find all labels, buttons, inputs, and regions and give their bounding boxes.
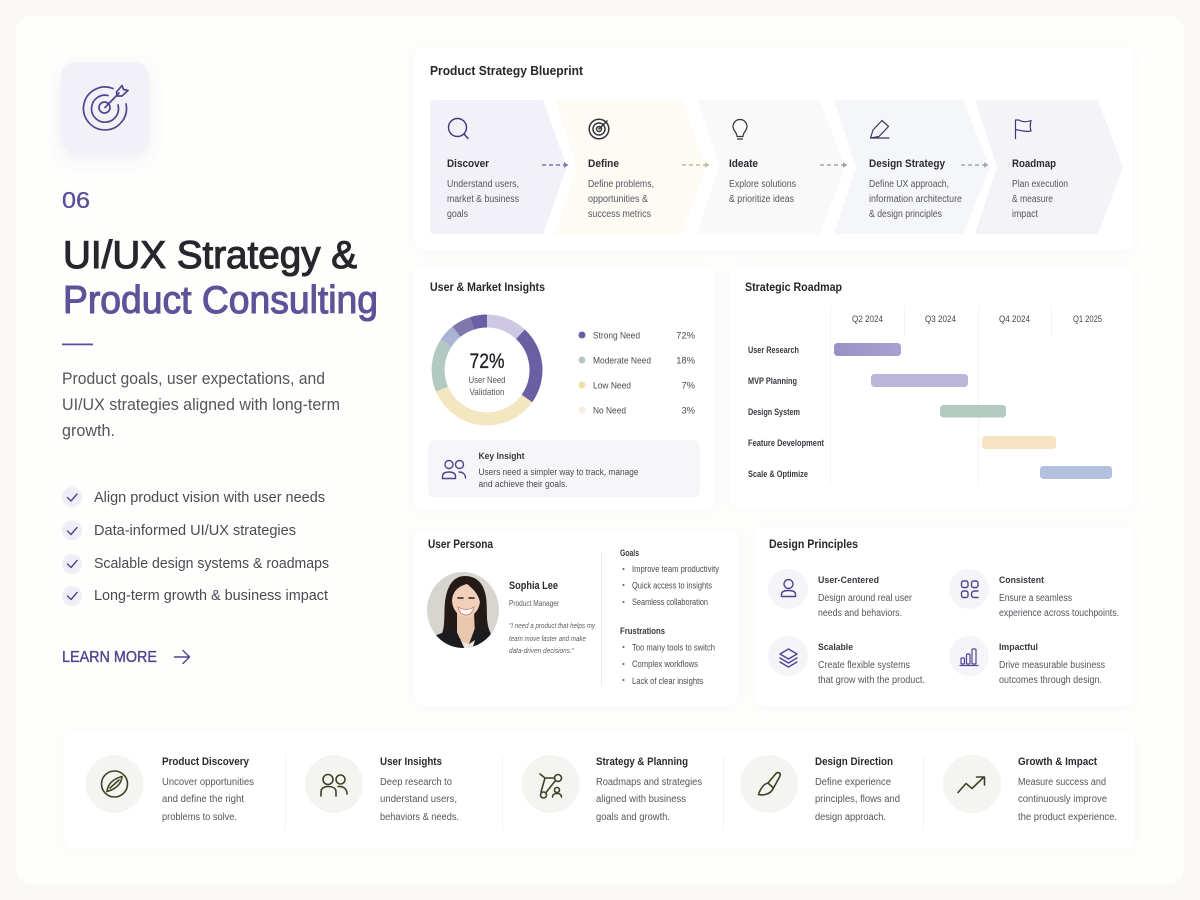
checklist <box>62 487 329 606</box>
portrait <box>427 572 499 648</box>
chevron: define: Define <box>588 158 619 170</box>
row: design system: Design System <box>748 407 800 417</box>
legend: 7% <box>681 380 695 390</box>
chevron: ideate: & prioritize ideas <box>729 194 794 205</box>
legend: 18% <box>676 354 695 366</box>
legend: No Need <box>593 404 626 416</box>
goals list: Goals <box>620 548 639 558</box>
chevron: design strategy: Define UX approach, <box>869 179 949 190</box>
item: design direction <box>740 755 900 823</box>
principle: user-centered <box>768 569 913 619</box>
donut chart <box>438 321 536 419</box>
description: Product goals, user expectations, and <box>62 370 325 388</box>
description: growth. <box>62 422 115 440</box>
legend: Low Need <box>593 380 631 390</box>
goals list: Improve team productivity <box>632 564 720 574</box>
frustrations list: Frustrations <box>620 626 665 636</box>
checklist: Long-term growth & business impact <box>94 587 329 604</box>
row: feature development: Feature Development <box>748 438 824 448</box>
chevron: roadmap <box>975 100 1123 234</box>
row: feature development <box>748 436 1056 449</box>
legend: Moderate Need <box>593 354 651 366</box>
heading: User & Market Insights <box>430 282 545 294</box>
arrow <box>820 162 848 168</box>
quarter headers: Q2 2024 <box>852 314 883 324</box>
frustrations list: Too many tools to switch <box>632 642 715 652</box>
item: product discovery: and define the right <box>162 794 244 805</box>
item: strategy and planning: aligned with business <box>596 794 686 805</box>
arrow <box>682 162 710 168</box>
heading: Product Strategy Blueprint <box>430 64 584 78</box>
donut centre value: User Need <box>468 375 506 385</box>
chevron: roadmap: impact <box>1012 209 1038 220</box>
item: product discovery: Uncover opportunities <box>162 777 254 788</box>
arrow <box>961 162 988 168</box>
item: product discovery: Product Discovery <box>162 756 249 768</box>
chevron: ideate: Ideate <box>729 158 758 170</box>
persona name and quote: "I need a product that helps my <box>509 621 596 630</box>
chevron: define <box>555 100 706 234</box>
quarter headers <box>852 314 1102 324</box>
goals list: Seamless collaboration <box>632 597 708 607</box>
panel: strategic roadmap <box>730 267 1132 508</box>
chevron: discover: Understand users, <box>447 179 519 190</box>
chevron: ideate <box>697 100 845 234</box>
legend: 72% <box>676 330 695 340</box>
legend <box>578 330 695 416</box>
checklist: Scalable design systems & roadmaps <box>94 555 329 572</box>
callout: key insight: Users need a simpler way to track, manage <box>478 466 638 477</box>
chevron: design strategy: Design Strategy <box>869 158 945 170</box>
item: design direction: principles, flows and <box>815 794 900 805</box>
item: user insights: behaviors & needs. <box>380 812 459 823</box>
item: design direction: design approach. <box>815 812 886 823</box>
chevron: roadmap: & measure <box>1012 194 1053 205</box>
item: user insights: understand users, <box>380 794 457 805</box>
principle: impactful <box>949 636 1105 686</box>
row: mvp planning <box>748 374 968 387</box>
section number: 06 <box>62 187 90 213</box>
chevron: define: success metrics <box>588 209 651 220</box>
principle: consistent: Ensure a seamless <box>999 593 1072 604</box>
callout: key insight: Key Insight <box>478 451 524 461</box>
row: mvp planning: MVP Planning <box>748 376 797 386</box>
chevron: design strategy: & design principles <box>869 209 942 220</box>
item: growth and impact: Growth & Impact <box>1018 756 1097 768</box>
row: scale and optimize <box>748 466 1112 479</box>
item: growth and impact <box>943 755 1117 823</box>
item: growth and impact: the product experience. <box>1018 812 1117 823</box>
principle: impactful: Drive measurable business <box>999 660 1105 671</box>
panel: capabilities strip <box>64 733 1134 848</box>
item: growth and impact: continuously improve <box>1018 794 1107 805</box>
gantt chart <box>748 306 1112 485</box>
panel: user and market insights <box>414 267 714 510</box>
persona name and quote: data-driven decisions." <box>509 646 574 655</box>
quarter headers: Q3 2024 <box>925 314 956 324</box>
item: strategy and planning: Strategy & Planning <box>596 756 688 768</box>
principle: scalable: Create flexible systems <box>818 660 910 671</box>
chevron: roadmap: Plan execution <box>1012 179 1068 190</box>
chevron: discover: goals <box>447 209 468 220</box>
item: product discovery <box>86 755 254 823</box>
principle: consistent: experience across touchpoints. <box>999 608 1119 619</box>
item: design direction: Define experience <box>815 777 891 788</box>
item: product discovery: problems to solve. <box>162 812 237 823</box>
arrow <box>542 162 568 168</box>
checklist: Align product vision with user needs <box>94 489 325 506</box>
heading: Design Principles <box>769 539 858 551</box>
panel: product strategy blueprint <box>414 48 1132 250</box>
row: user research: User Research <box>748 345 799 355</box>
description <box>62 370 340 440</box>
quarter headers: Q1 2025 <box>1073 314 1102 324</box>
row: scale and optimize: Scale & Optimize <box>748 469 808 479</box>
item: growth and impact: Measure success and <box>1018 777 1106 788</box>
quarter headers: Q4 2024 <box>999 314 1030 324</box>
checklist: Data-informed UI/UX strategies <box>94 522 296 539</box>
title <box>63 234 378 322</box>
principle: scalable: Scalable <box>818 642 853 652</box>
goals list: Quick access to insights <box>632 580 712 590</box>
persona name and quote <box>509 580 596 655</box>
principle: impactful: Impactful <box>999 642 1038 652</box>
persona name and quote: Product Manager <box>509 599 559 608</box>
frustrations list: Lack of clear insights <box>632 676 704 686</box>
left column: hero <box>61 62 378 666</box>
donut centre value: 72% <box>470 350 504 373</box>
donut centre value: Validation <box>470 387 505 397</box>
chevron: roadmap: Roadmap <box>1012 158 1056 170</box>
chevron: discover: market & business <box>447 194 519 205</box>
item: user insights <box>305 755 459 823</box>
item: user insights: Deep research to <box>380 777 452 788</box>
chevron: define: Define problems, <box>588 179 654 190</box>
title: UI/UX Strategy & <box>63 234 357 277</box>
title rule <box>62 344 93 345</box>
title: Product Consulting <box>63 279 378 322</box>
item: strategy and planning <box>522 755 702 823</box>
chevron: ideate: Explore solutions <box>729 179 796 190</box>
panel: design principles <box>755 527 1133 706</box>
learn more link: LEARN MORE <box>62 649 157 666</box>
principle: impactful: outcomes through design. <box>999 675 1102 686</box>
panel: user persona <box>427 540 719 686</box>
callout: key insight: and achieve their goals. <box>478 478 568 489</box>
row: user research <box>748 343 901 356</box>
persona name and quote: Sophia Lee <box>509 580 558 592</box>
principle: user-centered: needs and behaviors. <box>818 608 902 619</box>
principle: consistent <box>949 569 1119 619</box>
goals list <box>620 548 720 607</box>
principle: scalable: that grow with the product. <box>818 675 925 686</box>
principle: consistent: Consistent <box>999 575 1044 585</box>
frustrations list <box>620 626 715 686</box>
frustrations list: Complex workflows <box>632 659 699 669</box>
heading: User Persona <box>428 539 494 551</box>
legend: 3% <box>681 404 695 416</box>
item: strategy and planning: goals and growth. <box>596 812 670 823</box>
principle: user-centered: Design around real user <box>818 593 913 604</box>
chevron: discover: Discover <box>447 158 490 170</box>
principle: user-centered: User-Centered <box>818 575 879 585</box>
chevron: design strategy: information architecture <box>869 194 962 205</box>
item: strategy and planning: Roadmaps and strategies <box>596 777 702 788</box>
chevron: design strategy <box>834 100 990 234</box>
heading: Strategic Roadmap <box>745 282 842 294</box>
principle: scalable <box>768 636 925 686</box>
callout: key insight <box>428 440 700 497</box>
description: UI/UX strategies aligned with long-term <box>62 396 340 414</box>
chevron: define: opportunities & <box>588 194 648 205</box>
row: design system <box>748 405 1006 418</box>
chevron: discover <box>430 100 567 234</box>
item: user insights: User Insights <box>380 756 442 768</box>
legend: Strong Need <box>593 330 640 340</box>
donut centre value <box>468 350 506 397</box>
icon: target in tile <box>61 62 149 153</box>
persona name and quote: team move faster and make <box>509 634 586 643</box>
item: design direction: Design Direction <box>815 756 893 768</box>
